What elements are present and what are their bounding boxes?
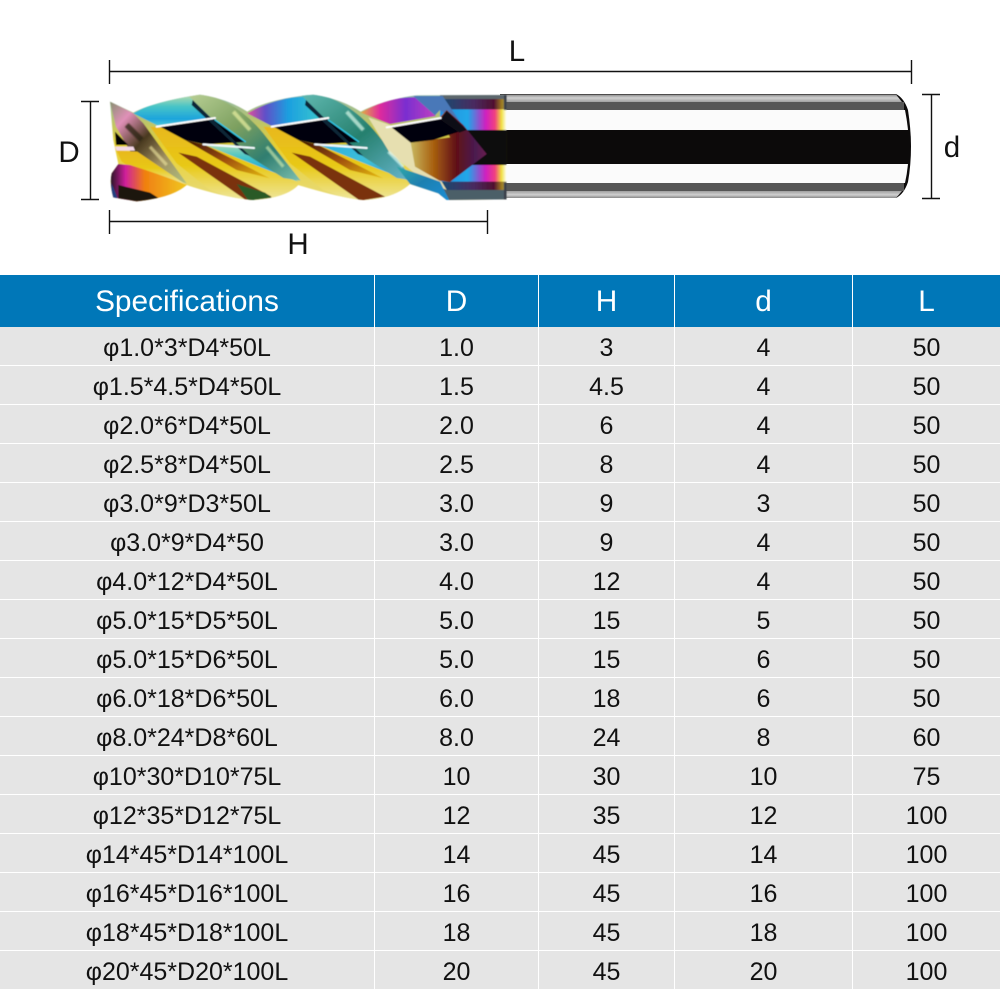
row 13: 12 bbox=[750, 802, 777, 830]
row 9 bbox=[0, 639, 1000, 677]
row 12: 10 bbox=[443, 763, 470, 791]
row 8: 5.0 bbox=[439, 607, 474, 635]
row 6 bbox=[0, 522, 1000, 560]
row 11: 24 bbox=[593, 724, 620, 752]
row 12 bbox=[0, 756, 1000, 794]
flutes and coated collar bbox=[107, 92, 507, 203]
label H: H bbox=[287, 228, 309, 261]
row 12: 10 bbox=[750, 763, 777, 791]
segment three bbox=[361, 97, 436, 124]
row 17 bbox=[0, 951, 1000, 989]
row 13: 12 bbox=[443, 802, 470, 830]
row 8: φ5.0*15*D5*50L bbox=[96, 607, 278, 635]
row 15: 16 bbox=[750, 880, 777, 908]
row 11: 60 bbox=[913, 724, 940, 752]
row 9: φ5.0*15*D6*50L bbox=[96, 646, 278, 674]
row 4: 2.5 bbox=[439, 451, 474, 479]
dimension H bbox=[110, 210, 488, 234]
collar bbox=[440, 95, 507, 100]
segment two bbox=[247, 97, 329, 126]
row 17: 45 bbox=[593, 958, 620, 986]
segment one bbox=[133, 97, 216, 126]
row 13: 35 bbox=[593, 802, 620, 830]
row 5: 50 bbox=[913, 490, 940, 518]
row 13 bbox=[0, 795, 1000, 833]
row 11: 8 bbox=[757, 724, 770, 752]
row 9: 5.0 bbox=[439, 646, 474, 674]
row 6: 4 bbox=[757, 529, 770, 557]
row 3: 50 bbox=[913, 412, 940, 440]
row 7: 4.0 bbox=[439, 568, 474, 596]
row 10: 6 bbox=[757, 685, 770, 713]
label D: D bbox=[58, 136, 80, 169]
row 3 bbox=[0, 405, 1000, 443]
row 2 bbox=[0, 366, 1000, 404]
row 7: 12 bbox=[593, 568, 620, 596]
row 1: 3 bbox=[600, 334, 613, 362]
body base bbox=[107, 92, 507, 203]
row 17: 20 bbox=[750, 958, 777, 986]
row 8: 50 bbox=[913, 607, 940, 635]
row 6: 9 bbox=[600, 529, 613, 557]
row 8 bbox=[0, 600, 1000, 638]
label d: d bbox=[944, 131, 960, 164]
table header: d bbox=[755, 285, 772, 318]
row 3: 2.0 bbox=[439, 412, 474, 440]
row 14: φ14*45*D14*100L bbox=[86, 841, 288, 869]
row 1 bbox=[0, 327, 1000, 365]
row 3: φ2.0*6*D4*50L bbox=[103, 412, 271, 440]
row 15 bbox=[0, 873, 1000, 911]
row 2: 4.5 bbox=[589, 373, 624, 401]
row 3: 6 bbox=[600, 412, 613, 440]
row 15: φ16*45*D16*100L bbox=[86, 880, 288, 908]
row 11 bbox=[0, 717, 1000, 755]
row 11: φ8.0*24*D8*60L bbox=[96, 724, 278, 752]
row 2: 1.5 bbox=[439, 373, 474, 401]
row 16: φ18*45*D18*100L bbox=[86, 919, 288, 947]
tip land bbox=[110, 102, 187, 183]
row 14 bbox=[0, 834, 1000, 872]
row 4: φ2.5*8*D4*50L bbox=[103, 451, 271, 479]
row 17: 20 bbox=[443, 958, 470, 986]
row 15: 100 bbox=[906, 880, 947, 908]
row 7: φ4.0*12*D4*50L bbox=[96, 568, 278, 596]
row 14: 45 bbox=[593, 841, 620, 869]
row 5 bbox=[0, 483, 1000, 521]
bright flute edges bbox=[157, 118, 441, 148]
row 16: 18 bbox=[443, 919, 470, 947]
table header: H bbox=[596, 285, 617, 318]
row 1: φ1.0*3*D4*50L bbox=[103, 334, 271, 362]
row 1: 1.0 bbox=[439, 334, 474, 362]
table header: L bbox=[918, 285, 935, 318]
row 9: 50 bbox=[913, 646, 940, 674]
row 6: φ3.0*9*D4*50 bbox=[110, 529, 264, 557]
row 8: 5 bbox=[757, 607, 770, 635]
row 7: 4 bbox=[757, 568, 770, 596]
row 17: 100 bbox=[906, 958, 947, 986]
row 5: 3 bbox=[757, 490, 770, 518]
icon: carbide end mill bbox=[107, 92, 911, 203]
row 17: φ20*45*D20*100L bbox=[86, 958, 288, 986]
row 9: 6 bbox=[757, 646, 770, 674]
row 15: 45 bbox=[593, 880, 620, 908]
row 10: 18 bbox=[593, 685, 620, 713]
row 12: φ10*30*D10*75L bbox=[93, 763, 281, 791]
row 10: φ6.0*18*D6*50L bbox=[96, 685, 278, 713]
row 4 bbox=[0, 444, 1000, 482]
row 2: 50 bbox=[913, 373, 940, 401]
row 2: 4 bbox=[757, 373, 770, 401]
row 9: 15 bbox=[593, 646, 620, 674]
row 12: 75 bbox=[913, 763, 940, 791]
specifications table bbox=[0, 275, 1000, 989]
row 7 bbox=[0, 561, 1000, 599]
row 8: 15 bbox=[593, 607, 620, 635]
dimension L bbox=[110, 60, 912, 84]
row 13: φ12*35*D12*75L bbox=[93, 802, 281, 830]
row 6: 50 bbox=[913, 529, 940, 557]
end mill diagram with dimensions bbox=[58, 35, 960, 261]
label L: L bbox=[509, 35, 525, 68]
row 11: 8.0 bbox=[439, 724, 474, 752]
dimension d bbox=[922, 94, 940, 198]
row 14: 100 bbox=[906, 841, 947, 869]
row 10: 6.0 bbox=[439, 685, 474, 713]
row 14: 14 bbox=[443, 841, 470, 869]
row 3: 4 bbox=[757, 412, 770, 440]
row 4: 50 bbox=[913, 451, 940, 479]
row 6: 3.0 bbox=[439, 529, 474, 557]
row 14: 14 bbox=[750, 841, 777, 869]
row 5: 3.0 bbox=[439, 490, 474, 518]
land streaks bbox=[127, 112, 403, 167]
row 7: 50 bbox=[913, 568, 940, 596]
row 2: φ1.5*4.5*D4*50L bbox=[93, 373, 281, 401]
row 16: 18 bbox=[750, 919, 777, 947]
row 4: 8 bbox=[600, 451, 613, 479]
row 10: 50 bbox=[913, 685, 940, 713]
row 16 bbox=[0, 912, 1000, 950]
row 4: 4 bbox=[757, 451, 770, 479]
row 13: 100 bbox=[906, 802, 947, 830]
row 10 bbox=[0, 678, 1000, 716]
table header: Specifications bbox=[95, 285, 279, 318]
row 16: 100 bbox=[906, 919, 947, 947]
row 5: φ3.0*9*D3*50L bbox=[103, 490, 271, 518]
dimension D bbox=[81, 102, 99, 200]
row 12: 30 bbox=[593, 763, 620, 791]
row 1: 50 bbox=[913, 334, 940, 362]
row 5: 9 bbox=[600, 490, 613, 518]
table header bbox=[0, 275, 1000, 327]
row 1: 4 bbox=[757, 334, 770, 362]
table header: D bbox=[446, 285, 467, 318]
shank bbox=[500, 94, 911, 198]
row 16: 45 bbox=[593, 919, 620, 947]
row 15: 16 bbox=[443, 880, 470, 908]
